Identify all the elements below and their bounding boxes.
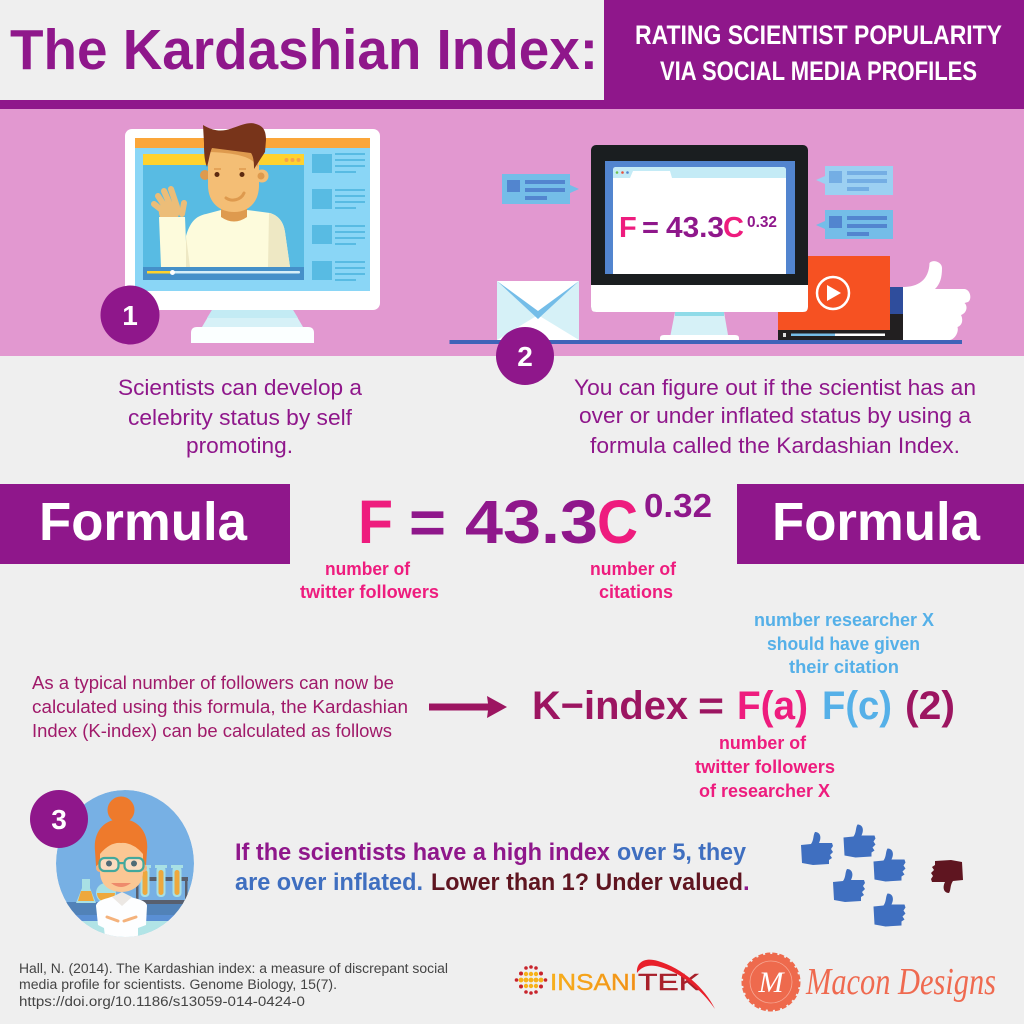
- panel: formula left: Formula: [39, 492, 248, 552]
- arrow: [429, 696, 507, 718]
- shelf line: [450, 340, 962, 344]
- main formula: F: [358, 488, 393, 556]
- text: step 2: over or under inflated status by using a: [579, 403, 972, 428]
- main formula: =: [409, 488, 446, 556]
- text: K-index intro: [32, 672, 408, 741]
- K-index formula: F(a): [737, 684, 808, 728]
- text: step 2: formula called the Kardashian Index.: [590, 433, 960, 458]
- K-index formula: F(c): [822, 684, 892, 728]
- formula on monitor: F: [619, 212, 637, 244]
- badge 1: 1: [122, 300, 138, 331]
- label: researcher followers: number of: [719, 733, 807, 753]
- K-index formula: (2): [905, 684, 955, 728]
- icon: thumbs down: [931, 860, 963, 893]
- icon: thumbs up group: [801, 824, 906, 926]
- icon: desktop monitor with formula: [591, 145, 890, 340]
- formula on monitor: C: [723, 212, 744, 244]
- K-index formula: =: [698, 684, 724, 728]
- badge 3: 3: [51, 804, 67, 835]
- icon: speech bubbles: [502, 166, 893, 239]
- logo: Insanitek: INSANI: [550, 969, 637, 995]
- figure: [95, 796, 147, 937]
- callout: index interpretation: over 5, they: [617, 839, 747, 866]
- citation: https://doi.org/10.1186/s13059-014-0424-0: [19, 994, 305, 1009]
- logo: Macon Designs: M: [758, 966, 786, 999]
- label: twitter followers: [300, 559, 439, 602]
- text: K-index intro: As a typical number of followers can now be: [32, 672, 394, 693]
- formula on monitor: 43.3: [666, 212, 724, 244]
- label: researcher citation: their citation: [789, 657, 899, 677]
- text: step 2: [574, 375, 976, 458]
- label: twitter followers: number of: [325, 559, 411, 579]
- icon: video player: [778, 256, 890, 340]
- formula on monitor: =: [642, 212, 659, 244]
- panel: formula right: Formula: [772, 492, 981, 552]
- callout: index interpretation: If the scientists have a high index: [235, 839, 611, 866]
- badge 2: 2: [517, 341, 533, 372]
- badge 3: [30, 790, 88, 848]
- label: citations: citations: [599, 582, 673, 602]
- callout: index interpretation: are over inflated.: [235, 869, 423, 896]
- icon: video monitor with presenter: [125, 123, 380, 343]
- text: K-index intro: calculated using this formula, the Kardashian: [32, 696, 408, 717]
- text: step 1: [118, 375, 363, 458]
- icon: envelope: [497, 281, 579, 340]
- label: researcher followers: of researcher X: [699, 781, 830, 801]
- label: researcher citation: number researcher X: [754, 610, 934, 630]
- callout: index interpretation: [235, 839, 750, 896]
- formula on monitor: [619, 212, 777, 244]
- callout: index interpretation: Lower than 1? Under valued: [431, 869, 743, 896]
- badge 1: [100, 286, 160, 344]
- K-index formula: [532, 684, 955, 728]
- citation: media profile for scientists. Genome Biology, 15(7).: [19, 977, 337, 992]
- label: citations: [590, 559, 677, 602]
- citation: Hall, N. (2014). The Kardashian index: a measure of discrepant social: [19, 961, 448, 976]
- badge 2: [496, 327, 554, 385]
- label: researcher followers: twitter followers: [695, 757, 835, 777]
- main formula: 0.32: [644, 487, 712, 524]
- icon: thumbs up hand: [890, 261, 970, 340]
- label: citations: number of: [590, 559, 677, 579]
- label: researcher citation: [754, 610, 934, 677]
- text: K-index intro: Index (K-index) can be calculated as follows: [32, 720, 392, 741]
- citation: [19, 961, 448, 1009]
- K-index formula: K−index: [532, 684, 688, 728]
- logo: Insanitek: [515, 960, 715, 1009]
- panel: formula right: [737, 484, 1024, 564]
- text: step 1: promoting.: [186, 433, 293, 458]
- title: The Kardashian Index:: [10, 18, 598, 82]
- label: researcher citation: should have given: [767, 634, 920, 654]
- text: step 2: You can figure out if the scientist has an: [574, 375, 976, 400]
- label: twitter followers: twitter followers: [300, 582, 439, 602]
- icon: scientist: [56, 790, 194, 937]
- callout: index interpretation: .: [743, 869, 750, 896]
- panel: illustrations background: [0, 109, 1024, 356]
- main formula: 43.3: [465, 488, 598, 556]
- panel: formula left: [0, 484, 290, 564]
- main formula: [358, 487, 712, 556]
- header band: [0, 0, 1024, 109]
- text: step 1: celebrity status by self: [128, 405, 353, 430]
- flasks: [76, 879, 116, 903]
- logo: Macon Designs: [743, 954, 996, 1010]
- text: step 1: Scientists can develop a: [118, 375, 363, 400]
- icon: presenter figure: [154, 123, 290, 267]
- test tubes: [135, 865, 188, 904]
- formula on monitor: 0.32: [747, 214, 777, 231]
- subtitle: [635, 20, 1002, 86]
- logo: Insanitek: TEK: [638, 969, 701, 995]
- main formula: C: [597, 488, 638, 556]
- label: researcher followers: [695, 733, 835, 801]
